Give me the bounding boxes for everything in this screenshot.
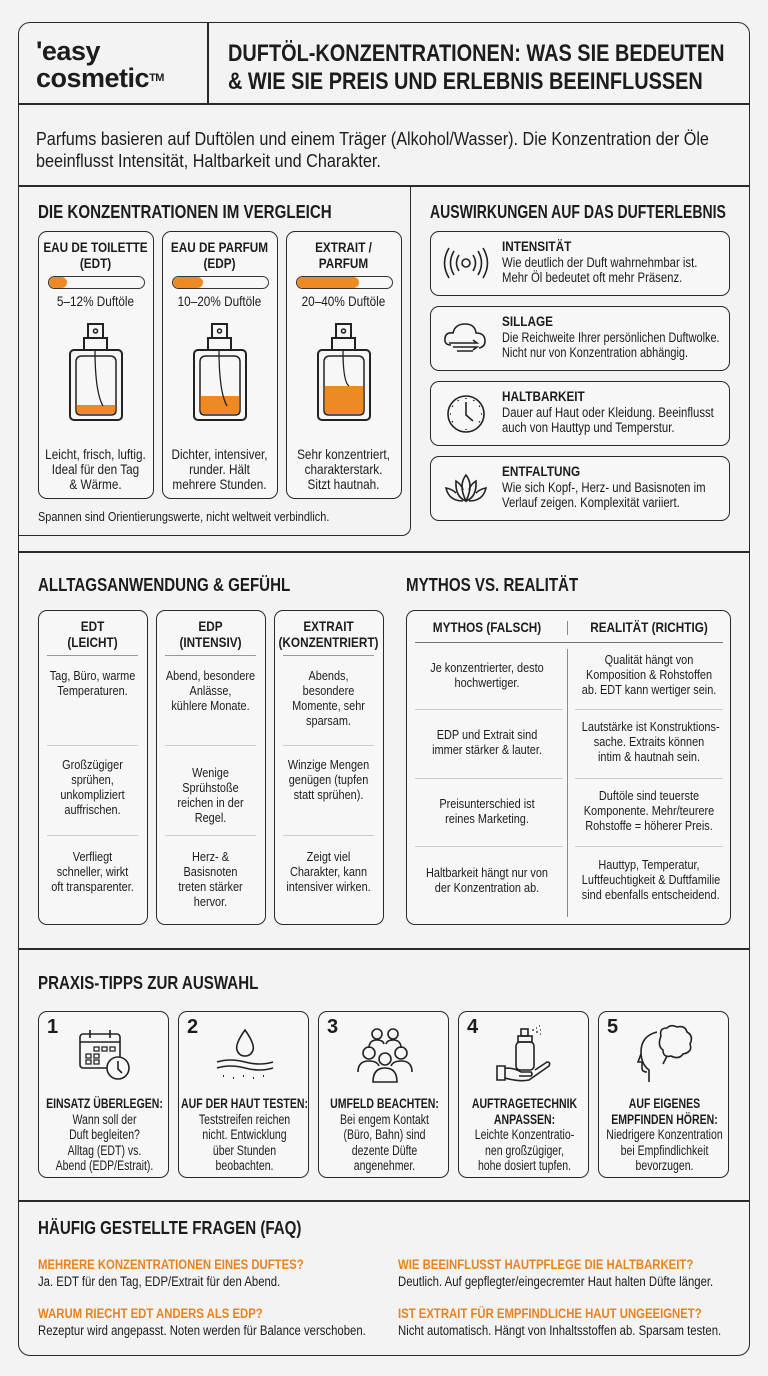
card: Extrait use: EXTRAIT: [303, 618, 354, 634]
card: Intensität: INTENSITÄT: [502, 238, 571, 254]
table: myths vs reality: Preisunterschied ist: [439, 796, 535, 811]
card: Extrait use: sparsam.: [306, 713, 351, 728]
tip 2: nicht. Entwicklung: [202, 1127, 287, 1142]
card: Extrait use: (KONZENTRIERT): [279, 634, 378, 650]
card: Extrait use: [274, 610, 384, 925]
tip 3: [318, 1011, 449, 1178]
table: myths vs reality: sache. Extraits können: [594, 734, 704, 749]
panel: concentrations: [18, 185, 411, 536]
card: Extrait use: Zeigt viel: [307, 849, 350, 864]
tip 1: [38, 1011, 169, 1178]
card: Entfaltung: Verlauf zeigen. Komplexität variiert.: [502, 495, 680, 510]
card: EDT use: Großzügiger: [62, 757, 123, 772]
faq 4: Nicht automatisch. Hängt von Inhaltsstoffen ab. Sparsam testen.: [398, 1323, 721, 1338]
title: DUFTÖL-KONZENTRATIONEN: WAS SIE BEDEUTEN: [228, 40, 725, 67]
card: Entfaltung: Wie sich Kopf-, Herz- und Basisnoten im: [502, 480, 706, 495]
tip 3: 3: [327, 1016, 338, 1038]
table: myths vs reality: Haltbarkeit hängt nur von: [426, 865, 548, 880]
card: Sillage: Die Reichweite Ihrer persönlichen Duftwolke.: [502, 330, 720, 345]
faq 2: Rezeptur wird angepasst. Noten werden für Balance verschoben.: [38, 1323, 366, 1338]
faq 3: WIE BEEINFLUSST HAUTPFLEGE DIE HALTBARKEIT?: [398, 1257, 693, 1272]
card: Extrait: [286, 231, 402, 499]
card: EDP use: reichen in der: [177, 795, 244, 810]
table: myths vs reality: EDP und Extrait sind: [437, 727, 537, 742]
card: Extrait use: intensiver wirken.: [286, 879, 371, 894]
icon: skin drop: [216, 1028, 274, 1079]
table: myths vs reality: Luftfeuchtigkeit & Duftfamilie: [582, 872, 720, 887]
card: EDT: 5–12% Duftöle: [57, 293, 134, 309]
card: Extrait: charakterstark.: [305, 461, 382, 477]
card: EDT use: auffrischen.: [64, 802, 121, 817]
title: & WIE SIE PREIS UND ERLEBNIS BEEINFLUSSEN: [228, 68, 703, 95]
card: EDT use: EDT: [81, 618, 104, 634]
card: EDP use: Wenige: [192, 765, 229, 780]
card: Extrait use: Charakter, kann: [290, 864, 367, 879]
card: EDP use: kühlere Monate.: [171, 698, 250, 713]
card: EDP use: Anlässe,: [190, 683, 231, 698]
tip 3: Bei engem Kontakt: [340, 1112, 429, 1126]
icon: clock: [447, 395, 485, 433]
icon: bottle high: [317, 323, 371, 421]
heading: concentrations: DIE KONZENTRATIONEN IM VERGLEICH: [38, 202, 332, 222]
card: EDP use: treten stärker: [178, 879, 243, 894]
tip 2: [178, 1011, 309, 1178]
card: EDP use: Basisnoten: [183, 864, 238, 879]
table: myths vs reality: Qualität hängt von: [605, 652, 693, 667]
card: Extrait: Sehr konzentriert,: [297, 446, 390, 462]
card: Extrait use: besondere: [303, 683, 354, 698]
intro text: beeinflusst Intensität, Haltbarkeit und Charakter.: [36, 151, 381, 171]
heading: FAQ: HÄUFIG GESTELLTE FRAGEN (FAQ): [38, 1218, 301, 1238]
tip 2: AUF DER HAUT TESTEN:: [181, 1096, 308, 1111]
tip 2: über Stunden: [213, 1142, 276, 1158]
icon: bottle medium: [193, 323, 247, 421]
card: EDP: Dichter, intensiver,: [171, 446, 268, 462]
card: EDP: mehrere Stunden.: [172, 476, 267, 492]
card: EDT use: schneller, wirkt: [57, 864, 128, 879]
tip 5: bei Empfindlichkeit: [621, 1142, 708, 1158]
card: EDP use: Abend, besondere: [166, 668, 255, 683]
tip 4: Leichte Konzentratio-: [475, 1127, 574, 1142]
card: EDP: (EDP): [203, 255, 236, 271]
card: Extrait: EXTRAIT /: [315, 239, 372, 255]
faq 1: Ja. EDT für den Tag, EDP/Extrait für den Abend.: [38, 1274, 280, 1289]
card: Intensität: Wie deutlich der Duft wahrnehmbar ist.: [502, 255, 697, 270]
tip 3: UMFELD BEACHTEN:: [330, 1096, 439, 1111]
tip 2: beobachten.: [216, 1158, 273, 1173]
card: EDP use: [156, 610, 266, 925]
tip 1: Abend (EDP/Estrait).: [56, 1158, 153, 1173]
table: myths vs reality: REALITÄT (RICHTIG): [590, 619, 708, 635]
card: EDT use: Tag, Büro, warme: [50, 668, 135, 683]
tip 1: Alltag (EDT) vs.: [68, 1142, 141, 1158]
tip 5: AUF EIGENES: [629, 1096, 700, 1111]
card: Extrait use: statt sprühen).: [294, 787, 363, 802]
faq 1: [38, 1257, 304, 1289]
faq 4: IST EXTRAIT FÜR EMPFINDLICHE HAUT UNGEEIGNET?: [398, 1306, 702, 1321]
card: Haltbarkeit: Dauer auf Haut oder Kleidung. Beeinflusst: [502, 405, 714, 420]
card: EDT use: Verfliegt: [73, 849, 112, 864]
table: myths vs reality: Hauttyp, Temperatur,: [598, 857, 700, 872]
card: Haltbarkeit: HALTBARKEIT: [502, 388, 585, 404]
heading: daily use: ALLTAGSANWENDUNG & GEFÜHL: [38, 575, 290, 595]
card: EDT use: oft transparenter.: [51, 879, 134, 894]
tip 3: angenehmer.: [354, 1158, 415, 1173]
faq 2: [38, 1306, 366, 1338]
heading: effects: AUSWIRKUNGEN AUF DAS DUFTERLEBNIS: [430, 202, 726, 222]
tip 5: bevorzugen.: [636, 1158, 693, 1173]
card: Intensität: [430, 231, 730, 296]
logo: cosmeticTM: [36, 63, 164, 93]
tip 2: Teststreifen reichen: [199, 1112, 290, 1126]
icon: signal: [444, 248, 488, 278]
icon: head thought: [637, 1024, 692, 1082]
tip 5: Niedrigere Konzentration: [606, 1127, 723, 1142]
card: Extrait use: genügen (tupfen: [289, 772, 368, 787]
table: myths vs reality: intim & hautnah sein.: [598, 749, 700, 764]
faq 4: [398, 1306, 721, 1338]
tip 4: ANPASSEN:: [494, 1112, 555, 1126]
faq 3: [398, 1257, 713, 1289]
card: Intensität: Mehr Öl bedeutet oft mehr Präsenz.: [502, 270, 682, 285]
table: myths vs reality: hochwertiger.: [455, 675, 519, 690]
logo: [36, 36, 164, 93]
table: myths vs reality: immer stärker & lauter.: [432, 742, 542, 757]
logo: 'easy: [36, 36, 100, 66]
card: EDT use: (LEICHT): [67, 634, 118, 650]
card: Haltbarkeit: auch von Hauttyp und Temperstur.: [502, 420, 675, 435]
heading: tips: PRAXIS-TIPPS ZUR AUSWAHL: [38, 973, 258, 993]
card: Sillage: SILLAGE: [502, 313, 553, 329]
card: Haltbarkeit: [430, 381, 730, 446]
tip 1: 1: [47, 1016, 58, 1038]
card: EDP: [162, 231, 278, 499]
card: EDT: EAU DE TOILETTE: [43, 239, 148, 255]
footnote: Spannen sind Orientierungswerte, nicht weltweit verbindlich.: [38, 509, 329, 524]
table: myths vs reality: [406, 610, 731, 925]
card: EDT use: sprühen,: [71, 772, 114, 787]
tip 3: (Büro, Bahn) sind: [344, 1127, 425, 1142]
table: myths vs reality: Rohstoffe = höherer Preis.: [585, 818, 713, 833]
tip 1: EINSATZ ÜBERLEGEN:: [46, 1096, 163, 1111]
table: myths vs reality: Je konzentrierter, desto: [430, 660, 544, 675]
table: myths vs reality: Komponente. Mehr/teurere: [584, 803, 714, 818]
icon: bottle low: [69, 323, 123, 421]
card: Sillage: Nicht nur von Konzentration abhängig.: [502, 345, 688, 360]
faq 3: Deutlich. Auf gepflegter/eingecremter Haut halten Düfte länger.: [398, 1274, 713, 1289]
card: Sillage: [430, 306, 730, 371]
card: Extrait use: Abends,: [308, 668, 349, 683]
table: myths vs reality: MYTHOS (FALSCH): [433, 619, 541, 635]
tip 4: hohe dosiert tupfen.: [478, 1158, 571, 1173]
faq 1: MEHRERE KONZENTRATIONEN EINES DUFTES?: [38, 1257, 304, 1272]
card: Extrait: PARFUM: [319, 255, 368, 271]
card: Entfaltung: ENTFALTUNG: [502, 463, 580, 479]
card: EDT: (EDT): [80, 255, 111, 271]
tip 3: dezente Düfte: [352, 1142, 417, 1158]
card: EDP use: (INTENSIV): [179, 634, 242, 650]
card: EDP use: hervor.: [194, 894, 227, 909]
card: EDT: Ideal für den Tag: [52, 461, 139, 477]
faq 2: WARUM RIECHT EDT ANDERS ALS EDP?: [38, 1306, 263, 1321]
tip 4: 4: [467, 1016, 478, 1038]
table: myths vs reality: der Konzentration ab.: [435, 880, 539, 895]
tip 5: [598, 1011, 729, 1178]
table: myths vs reality: Duftöle sind teuerste: [599, 788, 699, 803]
card: EDT: [38, 231, 154, 499]
card: Extrait: 20–40% Duftöle: [302, 293, 385, 309]
card: EDP use: Sprühstoße: [182, 780, 239, 795]
tip 4: [458, 1011, 589, 1178]
icon: hand spray: [496, 1025, 550, 1082]
card: EDP: 10–20% Duftöle: [178, 293, 261, 309]
icon: cloud wind: [444, 323, 486, 352]
card: EDP: runder. Hält: [189, 461, 250, 477]
card: Extrait use: Winzige Mengen: [288, 757, 369, 772]
card: EDT: & Wärme.: [69, 476, 122, 492]
title: [228, 40, 725, 95]
table: myths vs reality: Lautstärke ist Konstruktions-: [582, 719, 720, 734]
card: Extrait: Sitzt hautnah.: [308, 476, 379, 492]
tip 1: Wann soll der: [72, 1112, 136, 1126]
table: myths vs reality: sind ebenfalls entscheidend.: [582, 887, 720, 902]
heading: myths: MYTHOS VS. REALITÄT: [406, 575, 578, 595]
card: EDP use: Regel.: [195, 810, 226, 825]
tip 2: 2: [187, 1016, 198, 1038]
card: EDP use: EDP: [198, 618, 223, 634]
icon: calendar: [79, 1030, 130, 1080]
card: EDT use: [38, 610, 148, 925]
icon: people: [357, 1028, 413, 1083]
card: Entfaltung: [430, 456, 730, 521]
table: myths vs reality: ab. EDT kann wertiger sein.: [582, 682, 716, 697]
card: EDT: Leicht, frisch, luftig.: [45, 446, 146, 462]
card: EDP: EAU DE PARFUM: [171, 239, 268, 255]
card: EDT use: Temperaturen.: [57, 683, 128, 698]
tip 4: nen großzügiger,: [485, 1142, 564, 1158]
card: EDP use: Herz- &: [192, 849, 229, 864]
tip 5: 5: [607, 1016, 618, 1038]
tip 4: AUFTRAGETECHNIK: [472, 1096, 577, 1111]
intro text: [36, 129, 709, 171]
card: EDT use: unkompliziert: [60, 787, 125, 802]
tip 5: EMPFINDEN HÖREN:: [611, 1112, 718, 1126]
intro text: Parfums basieren auf Duftölen und einem Träger (Alkohol/Wasser). Die Konzentration der Öle: [36, 129, 709, 149]
icon: lotus: [445, 474, 487, 503]
table: myths vs reality: Komposition & Rohstoffen: [586, 667, 712, 682]
card: Extrait use: Momente, sehr: [292, 698, 365, 713]
table: myths vs reality: reines Marketing.: [445, 811, 529, 826]
tip 1: Duft begleiten?: [69, 1127, 140, 1142]
